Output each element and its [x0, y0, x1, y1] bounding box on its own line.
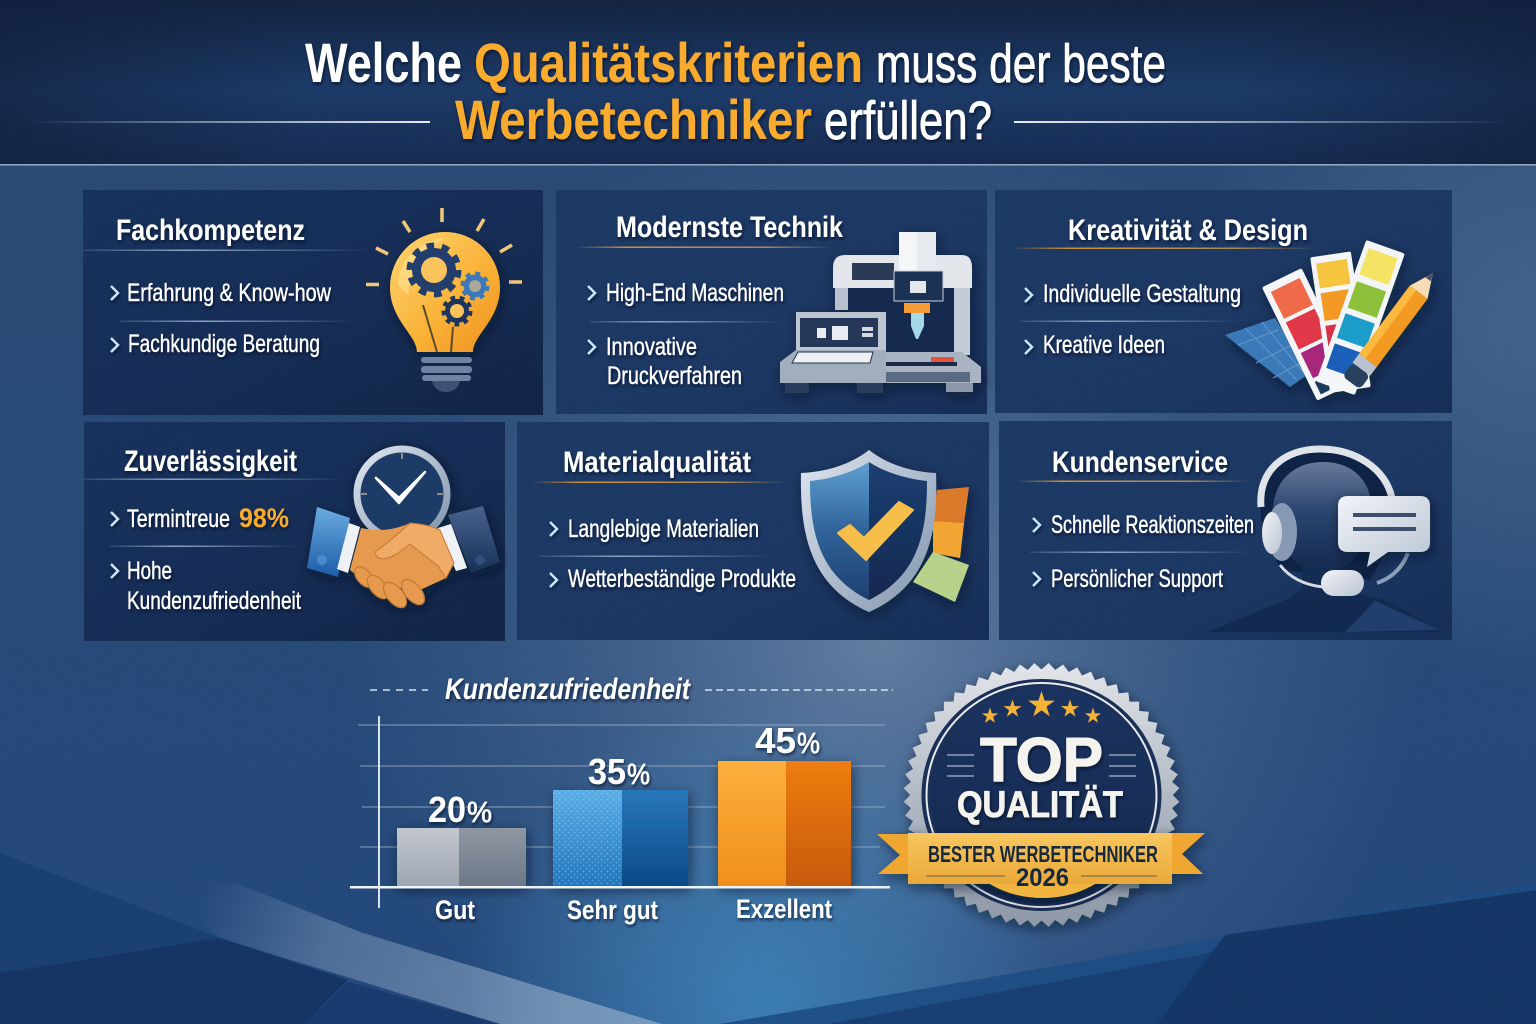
chart heading: Kundenzufriedenheit [445, 673, 692, 706]
panel backgrounds [83, 190, 1452, 641]
title: Qualitätskriterien [474, 31, 863, 94]
heading: Kundenservice: Kundenservice [1052, 446, 1228, 479]
list: Zuverlässigkeit [111, 503, 301, 615]
value labels: 45 [755, 720, 796, 761]
list: Kreativität & Design: Kreative Ideen [1043, 331, 1165, 359]
bar: Exzellent 45% [718, 761, 851, 886]
ribbon text: BESTER WERBETECHNIKER [928, 841, 1158, 867]
list: Materialqualität: Wetterbeständige Produkte [568, 565, 796, 593]
category labels: Sehr gut [567, 895, 658, 925]
list: Zuverlässigkeit: Kundenzufriedenheit [127, 587, 301, 615]
list: Modernste Technik [588, 279, 784, 390]
list: Materialqualität [550, 515, 796, 593]
list: Kundenservice: Schnelle Reaktionszeiten [1051, 511, 1254, 539]
serrated silver seal [902, 661, 1182, 929]
title [305, 31, 1166, 151]
ribbon text: 2026 [1016, 864, 1069, 892]
list: Zuverlässigkeit: 98% [239, 503, 289, 533]
value labels: % [467, 797, 492, 829]
panel: Fachkompetenz [83, 208, 522, 392]
heading: Fachkompetenz: Fachkompetenz [116, 214, 305, 247]
value labels: % [797, 728, 820, 760]
list: Kreativität & Design [1025, 280, 1241, 359]
icon: color swatches and pencil [1225, 240, 1442, 401]
heading: Materialqualität: Materialqualität [563, 446, 751, 479]
ribbon [877, 833, 1205, 898]
title: Werbetechniker [455, 88, 812, 151]
badge: Top Qualität [877, 661, 1205, 929]
rating stars [982, 691, 1101, 723]
list: Zuverlässigkeit: Hohe [127, 557, 172, 585]
value labels [428, 720, 820, 830]
list: Kundenservice: Persönlicher Support [1051, 565, 1223, 593]
panel: Materialqualität [530, 446, 969, 612]
list: Fachkompetenz: Erfahrung & Know-how [127, 279, 332, 307]
ribbon text [926, 841, 1158, 892]
bar chart: Kundenzufriedenheit [350, 673, 893, 925]
heading: Zuverlässigkeit: Zuverlässigkeit [124, 445, 297, 478]
list: Modernste Technik: Innovative [606, 333, 697, 361]
icon: headset agent with speech bubble [1208, 449, 1445, 632]
category labels: Gut [435, 895, 475, 925]
list: Fachkompetenz [111, 279, 332, 358]
badge text: TOP QUALITÄT: QUALITÄT [957, 784, 1123, 825]
badge text: TOP QUALITÄT [957, 726, 1123, 825]
badge text: TOP QUALITÄT: TOP [980, 726, 1103, 795]
panel: Modernste Technik [575, 211, 981, 393]
category labels: Exzellent [736, 894, 832, 924]
list: Kreativität & Design: Individuelle Gestaltung [1043, 280, 1241, 308]
heading: Kreativität & Design: Kreativität & Design [1068, 214, 1308, 247]
list: Kundenservice [1033, 511, 1254, 593]
list: Modernste Technik: High-End Maschinen [606, 279, 784, 307]
value labels: 35 [588, 751, 626, 792]
heading: Modernste Technik: Modernste Technik [616, 211, 843, 244]
bar: Gut 20% [397, 828, 526, 886]
icon: shield with check mark and material samples [801, 450, 969, 612]
icon: large format printing machine [780, 232, 981, 393]
icon: light bulb with gears [366, 208, 522, 392]
category labels [435, 894, 832, 925]
list: Modernste Technik: Druckverfahren [607, 362, 742, 390]
panel: Kreativität & Design [1010, 214, 1442, 401]
icon: clock and handshake [307, 442, 500, 612]
list: Materialqualität: Langlebige Materialien [568, 515, 759, 543]
title: muss der beste [876, 34, 1166, 94]
list: Zuverlässigkeit: Termintreue [127, 505, 230, 533]
title: Welche [305, 31, 462, 94]
panel: Kundenservice [1015, 446, 1445, 632]
panel: Zuverlässigkeit [84, 442, 500, 615]
list: Fachkompetenz: Fachkundige Beratung [128, 330, 320, 358]
bar: Sehr gut 35% [553, 790, 688, 886]
value labels: 20 [428, 789, 466, 830]
value labels: % [627, 759, 650, 791]
header band [0, 0, 1536, 166]
title: erfüllen? [824, 91, 992, 151]
